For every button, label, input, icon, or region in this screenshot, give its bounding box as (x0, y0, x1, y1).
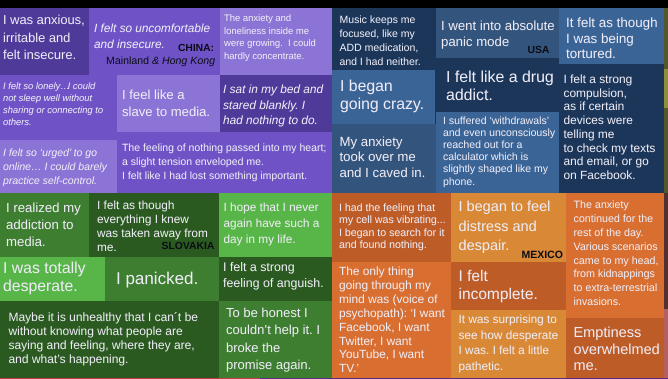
quote: rest of the day: rest of the day. (574, 227, 643, 239)
quote: voice of psychopath: mind was (voice of (339, 292, 437, 306)
quote: so lonely: I felt so lonely… I could (3, 80, 95, 91)
quote: cell was vibrating: I began to search for it (339, 227, 444, 239)
quote: cell was vibrating: and found nothing. (339, 239, 427, 251)
quote: strong compulsion (559, 64, 664, 193)
label: China: CHINA: (178, 43, 214, 54)
quote: anxiety took over: and I caved in. (340, 165, 425, 180)
quote: urged to go online (0, 140, 117, 193)
quote: voice of psychopath: going through my (339, 278, 431, 292)
quote: rest of the day: The anxiety (574, 199, 629, 211)
quote: drug addict (436, 58, 559, 112)
label: Mexico: MEXICO (522, 249, 563, 261)
quote: unhealthy: Maybe it is unhealthy that I can´t be (8, 310, 198, 324)
quote: to be honest: To be honest I (226, 304, 308, 320)
quote: anxiety took over (332, 124, 436, 193)
quote: rest of the day (566, 193, 664, 318)
quote: everything taken away: was taken away from (97, 226, 208, 240)
quote: music keeps me focused: focused, like my (340, 28, 415, 40)
quote: urged to go online: practice self-control. (3, 175, 97, 187)
quote: strong compulsion: I felt a strong (564, 72, 632, 86)
right edge colour strip (664, 8, 668, 378)
quote: sat in my bed: had nothing to do. (223, 113, 318, 127)
quote: emptiness overwhelmed: Emptiness (574, 325, 641, 341)
quote: being tortured: tortured. (566, 46, 616, 61)
quote: music keeps me focused: Music keeps me (340, 14, 415, 26)
quote: unhealthy: without knowing what people are (8, 324, 183, 338)
quote: to be honest: promise again. (226, 357, 311, 372)
quote: strong compulsion: on Facebook. (564, 168, 636, 182)
quote: slave to media: slave to media. (122, 104, 210, 118)
quote: totally desperate (0, 257, 105, 301)
quote: incomplete: incomplete. (458, 286, 538, 303)
quote: anxiety and loneliness: The anxiety and (224, 13, 291, 24)
quote: everything taken away: me. (97, 240, 117, 254)
quote: withdrawals (436, 112, 559, 193)
quote: how desperate: see how desperate (458, 328, 558, 342)
quote: voice of psychopath: psychopath): ‘I want (339, 306, 445, 320)
quote: withdrawals: calculator which is (443, 151, 528, 163)
panel: Slovakia quotes (0, 193, 332, 378)
quote: anxious, irritable: felt insecure. (3, 47, 76, 62)
quote: urged to go online: online… I could barely (3, 161, 107, 173)
quote: withdrawals: I suffered ‘withdrawals’ (443, 115, 549, 127)
quote: so lonely: not sleep well without (3, 92, 92, 103)
quote: distress and despair (451, 193, 566, 262)
quote: absolute panic mode (436, 8, 559, 58)
label: USA: USA (528, 45, 549, 56)
quote: everything taken away: I felt as though (97, 198, 174, 212)
quote: distress and despair: despair. (458, 238, 509, 254)
quote: withdrawals: and even unconsciously (443, 127, 555, 139)
quote: strong compulsion: to check my texts (564, 141, 655, 155)
quote: realized my addiction: addiction to (6, 217, 73, 232)
bottom edge colour strip (0, 378, 668, 379)
quote: so lonely (0, 75, 117, 140)
quote: everything taken away (89, 193, 219, 257)
quote: anxiety and loneliness: hardly concentrate. (224, 51, 304, 62)
quote: anxiety and loneliness: were growing. I could (224, 38, 316, 49)
quote: rest of the day: continued for the (574, 213, 653, 225)
quote: to be honest: broke the (226, 340, 280, 355)
quote: emptiness overwhelmed: me. (574, 358, 598, 374)
quote: how desperate: It was surprising to (458, 312, 557, 326)
quote: music keeps me focused: ADD medication, (340, 42, 418, 54)
quote: to be honest: couldn’t help it. I (226, 322, 320, 337)
quote: absolute panic mode: panic mode (441, 34, 509, 48)
quote: distress and despair: distress and (458, 219, 537, 235)
quote: going crazy: going crazy. (340, 96, 424, 113)
quote: rest of the day: came to my head, (574, 255, 658, 267)
quote: rest of the day: to extra-terrestrial (574, 282, 657, 294)
quote: voice of psychopath: TV.’ (339, 361, 359, 375)
quote: cell was vibrating: I had the feeling that (339, 202, 435, 214)
quote: to be honest (219, 301, 332, 378)
quote: voice of psychopath: Twitter, I want (339, 334, 412, 348)
quote: strong compulsion: compulsion, (564, 86, 627, 100)
quote: withdrawals: reached out for a (443, 139, 522, 151)
quote: sat in my bed: stared blankly. I (223, 98, 305, 112)
quote: going crazy: I began (340, 78, 393, 95)
quote: anxiety took over: My anxiety (340, 134, 403, 149)
quote: voice of psychopath (332, 262, 451, 378)
quote: cell was vibrating (332, 193, 451, 262)
quote: uncomfortable and insecure: I felt so uncomfortable (94, 21, 210, 35)
quote: realized my addiction: media. (6, 234, 46, 249)
quote: anxiety took over: took over me (340, 149, 416, 164)
quote: unhealthy (0, 301, 219, 378)
quote: realized my addiction: I realized my (6, 200, 81, 215)
quote: anxious, irritable: I was anxious, (3, 12, 85, 27)
quote: feeling of anguish (219, 257, 332, 301)
quote: so lonely: sharing or connecting to (3, 104, 103, 115)
panel: USA quotes (332, 8, 664, 193)
quote: unhealthy: and what’s happening. (8, 352, 128, 366)
quote: anxious, irritable: irritable and (3, 30, 70, 45)
quote: feeling of nothing: I felt like I had lost something important. (122, 170, 307, 182)
quote: strong compulsion: and email, or go (564, 154, 649, 168)
quote: anxious, irritable (0, 8, 89, 75)
quote: uncomfortable and insecure: and insecure. (94, 37, 165, 51)
quote: hope never again (219, 193, 332, 257)
quote: incomplete: I felt (458, 268, 488, 285)
quote: hope never again: day in my life. (224, 232, 296, 246)
panel: Mexico quotes (332, 193, 664, 378)
quote: hope never again: I hope that I never (224, 200, 319, 214)
quote: drug addict: addict. (446, 87, 493, 104)
quote: totally desperate: desperate. (3, 278, 78, 295)
quote: rest of the day: invasions. (574, 296, 621, 308)
label: Slovakia: SLOVAKIA (162, 241, 214, 252)
quote: being tortured (559, 8, 664, 64)
quote: anxiety and loneliness (220, 8, 332, 75)
quote: unhealthy: saying and feeling, where they are, (8, 338, 195, 352)
quote: so lonely: others. (3, 116, 32, 127)
quote: how desperate (451, 310, 566, 378)
quote: how desperate: pathetic. (458, 359, 503, 373)
quote: feeling of nothing: The feeling of nothing passed into my heart; (122, 142, 326, 154)
quote: drug addict: I felt like a drug (446, 68, 554, 86)
quote: cell was vibrating: my cell was vibrating... (339, 214, 446, 226)
panel: China quotes (0, 8, 332, 193)
quote: withdrawals: phone. (443, 176, 475, 188)
quote: being tortured: I was being (566, 31, 634, 46)
quote: feeling of nothing (117, 132, 332, 193)
quote: music keeps me focused: and I had neither. (340, 56, 421, 68)
quote: sat in my bed (220, 75, 332, 132)
quote: music keeps me focused (332, 8, 436, 70)
quote: withdrawals: slightly shaped like my (443, 163, 548, 175)
quote: hope never again: again have such a (224, 216, 319, 230)
quote: incomplete (451, 262, 566, 310)
quote: voice of psychopath: YouTube, I want (339, 347, 424, 361)
quote: voice of psychopath: Facebook, I want (339, 320, 430, 334)
quote: feeling of nothing: a slight tension enveloped me. (122, 156, 264, 168)
quote: panicked: I panicked. (116, 269, 198, 288)
quote: how desperate: I was. I felt a little (458, 343, 549, 357)
quote: urged to go online: I felt so ‘urged’ to go (3, 147, 97, 159)
quote: strong compulsion: telling me (564, 127, 614, 141)
quote: slave to media: I feel like a (122, 86, 185, 102)
quote: panicked (105, 257, 219, 301)
quote: strong compulsion: devices were (564, 113, 633, 127)
quote: slave to media (117, 75, 220, 132)
quote: absolute panic mode: I went into absolute (441, 18, 555, 33)
quote: sat in my bed: I sat in my bed and (223, 82, 323, 96)
quote: feeling of anguish: I felt a strong (223, 260, 295, 274)
quote: emptiness overwhelmed (566, 318, 664, 378)
quote: realized my addiction (0, 193, 89, 257)
quote: anxiety and loneliness: loneliness inside me (224, 26, 309, 37)
quote: uncomfortable and insecure (89, 8, 220, 75)
quote: totally desperate: I was totally (3, 260, 86, 277)
quote: strong compulsion: as if certain (564, 99, 624, 113)
quote: voice of psychopath: The only thing (339, 264, 414, 278)
quote: rest of the day: Various scenarios (574, 241, 658, 253)
quote: emptiness overwhelmed: overwhelmed (574, 342, 660, 358)
quote: going crazy (332, 70, 435, 124)
quote: everything taken away: everything I knew (97, 212, 189, 226)
quote: feeling of anguish: feeling of anguish. (223, 276, 324, 290)
quote: being tortured: It felt as though (566, 15, 658, 30)
quote: distress and despair: I began to feel (458, 199, 550, 215)
label: Mainland and Hong Kong: Mainland & Hong Kong (106, 55, 215, 67)
quote: rest of the day: from kidnappings (574, 268, 655, 280)
